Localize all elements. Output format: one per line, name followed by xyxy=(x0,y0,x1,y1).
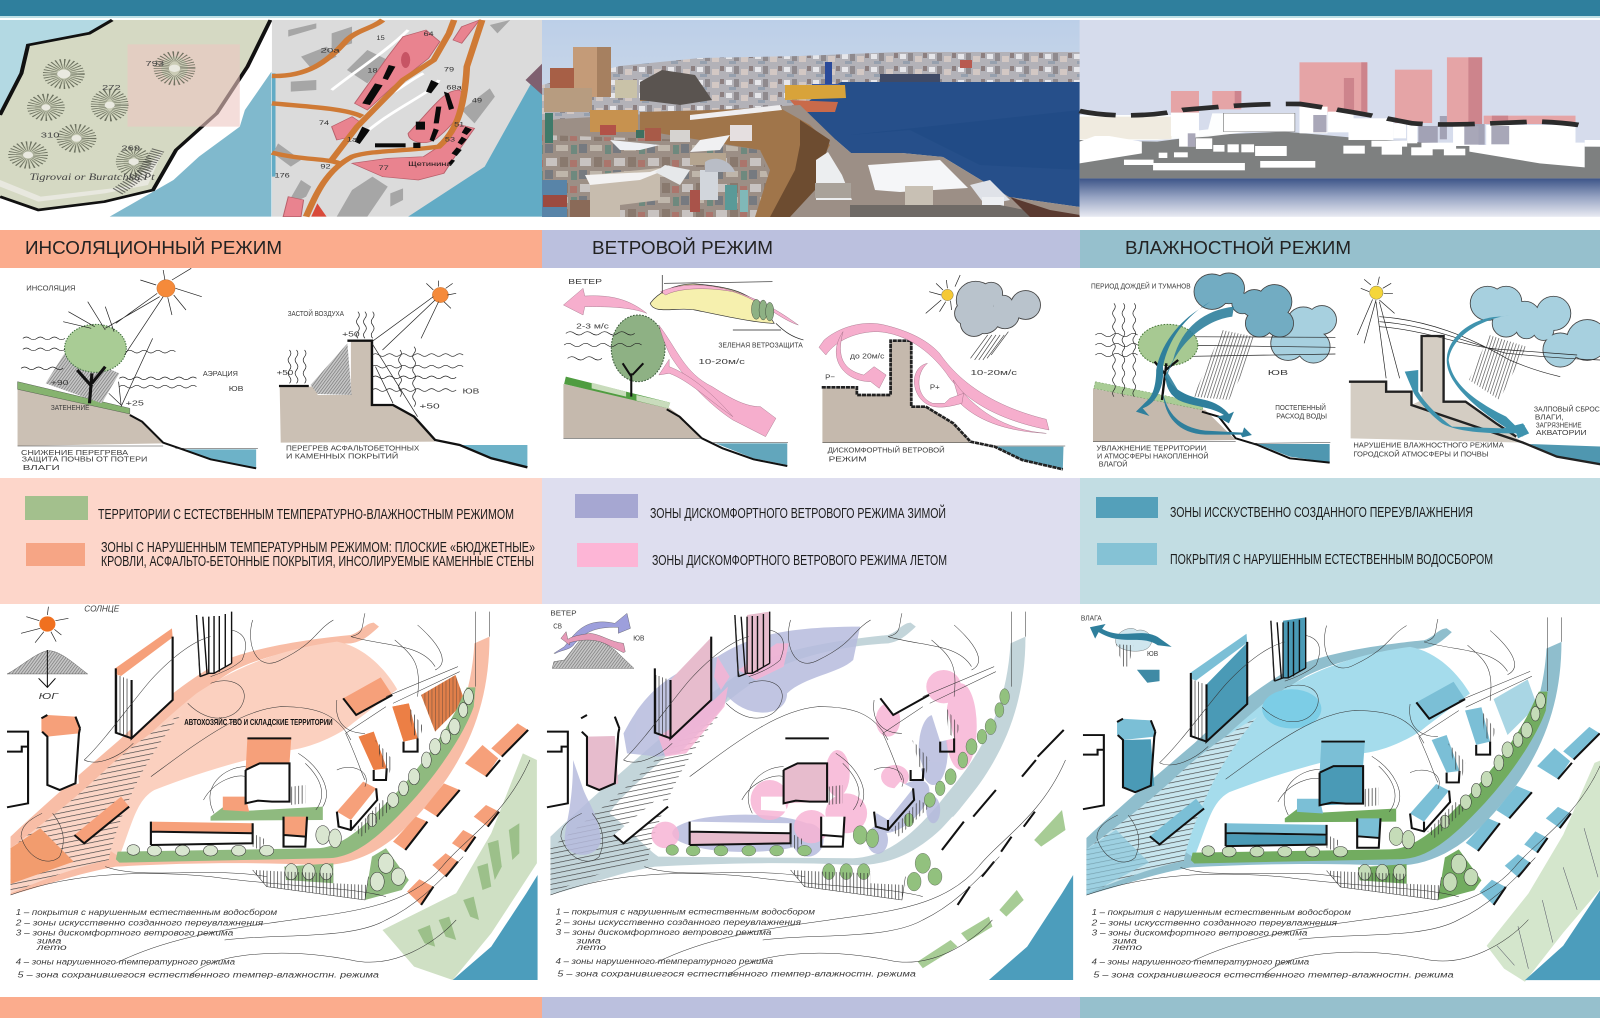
band: humidity heading xyxy=(1080,230,1600,268)
sketch: tree on slope xyxy=(18,268,258,472)
image: skyline silhouette section xyxy=(1080,20,1600,217)
sketch: wind around a wall: до 20м/с xyxy=(850,351,885,360)
sketch: tree, clouds and rain: ВЛАГОЙ xyxy=(1099,460,1127,469)
sketch: overheated wall xyxy=(277,281,527,467)
sketch: tree on slope: ЗАЩИТА ПОЧВЫ ОТ ПОТЕРИ xyxy=(22,454,147,463)
image: street map with red zones: 1a xyxy=(347,136,358,143)
image: street map with red zones: 77 xyxy=(379,165,389,172)
image: street map with red zones: 64 xyxy=(423,31,434,38)
sketch: tree on slope: ИНСОЛЯЦИЯ xyxy=(26,284,76,293)
sketch: wind around a wall xyxy=(819,275,1065,469)
image: street map with red zones: 49 xyxy=(472,97,482,104)
sketch: overheated wall: ЮВ xyxy=(462,387,479,395)
sketch: tree, clouds and rain xyxy=(1091,273,1336,469)
sketch: overheated wall: +50 xyxy=(342,330,360,339)
sketch: tree on slope: СНИЖЕНИЕ ПЕРЕГРЕВА xyxy=(21,448,129,457)
sketch: disturbed runoff: ВЛАГИ, xyxy=(1535,412,1564,421)
wind discomfort zones xyxy=(565,627,977,857)
handwritten key: 5 – зона сохранившегося естественного темпер-влажностн. режима xyxy=(1093,970,1454,979)
sketch: tree on slope: ВЛАГИ xyxy=(23,463,60,472)
sketch: disturbed runoff: АКВАТОРИИ xyxy=(1536,428,1587,437)
sketch: tree on slope: ЗАТЕНЕНИЕ xyxy=(51,403,89,412)
panel: insolation legend: ТЕРРИТОРИИ С ЕСТЕСТВЕННЫМ ТЕМПЕРАТУРНО-ВЛАЖНОСТНЫМ РЕЖИМОМ xyxy=(98,506,514,523)
sketch: tree windbreak: 2-3 м/с xyxy=(576,321,609,330)
handwritten key: зима xyxy=(575,935,601,945)
sketch: tree, clouds and rain: РАСХОД ВОДЫ xyxy=(1276,411,1327,420)
header bar xyxy=(0,0,1600,18)
pink towers xyxy=(1171,57,1576,124)
sketch: tree windbreak: ЗЕЛЕНАЯ ВЕТРОЗАЩИТА xyxy=(718,340,803,349)
handwritten key: зима xyxy=(36,936,62,945)
sketch: tree, clouds and rain: ЮВ xyxy=(1268,368,1288,377)
icon: moisture diagram xyxy=(1090,624,1172,683)
handwritten key: 3 – зоны дискомфортного ветрового режима xyxy=(556,927,772,937)
sketch: tree, clouds and rain: ПОСТЕПЕННЫЙ xyxy=(1275,403,1326,412)
image: photo of the bay xyxy=(542,20,1080,217)
handwritten key: 5 – зона сохранившегося естественного темпер-влажностн. режима xyxy=(557,969,916,979)
image: street map with red zones: 74 xyxy=(319,120,330,127)
sketch: wind around a wall: Р+ xyxy=(930,382,940,391)
sketch: tree, clouds and rain: И АТМОСФЕРЫ НАКОПЛЕННОЙ xyxy=(1097,451,1209,460)
handwritten key: 2 – зоны искусственно созданного переувлажнения xyxy=(15,918,264,928)
sketch: disturbed runoff: ЗАГРЯЗНЕНИЕ xyxy=(1536,421,1582,430)
handwritten key: лето xyxy=(35,942,67,952)
image: street map with red zones: 18 xyxy=(367,67,378,74)
image: historical island map: Tigrovai or Buratchka Pt xyxy=(30,171,155,182)
sketch: wind around a wall: Р− xyxy=(825,372,836,381)
footer band: wind xyxy=(542,997,1080,1018)
icon: wind rose diagram xyxy=(552,613,634,668)
panel: insolation site plan: ЮГ xyxy=(39,691,60,701)
image: historical island map: 310 xyxy=(41,131,60,140)
image: street map with red zones: 15 xyxy=(377,35,385,42)
panel: insolation legend: ЗОНЫ С НАРУШЕННЫМ ТЕМПЕРАТУРНЫМ РЕЖИМОМ: ПЛОСКИЕ «БЮДЖЕТНЫЕ» xyxy=(101,539,535,556)
sketch: disturbed runoff xyxy=(1349,277,1600,465)
panel: wind site plan: СВ xyxy=(553,621,562,630)
sketch: tree windbreak: ВЕТЕР xyxy=(568,277,602,286)
handwritten key: 1 – покрытия с нарушенным естественным водосбором xyxy=(556,906,815,916)
handwritten key: 4 – зоны нарушенного температурного режима xyxy=(556,956,773,966)
panel: wind legend: ЗОНЫ ДИСКОМФОРТНОГО ВЕТРОВОГО РЕЖИМА ЛЕТОМ xyxy=(652,552,947,569)
sketch: wind around a wall: РЕЖИМ xyxy=(829,455,866,464)
sketch: disturbed runoff: НАРУШЕНИЕ ВЛАЖНОСТНОГО РЕЖИМА xyxy=(1353,440,1505,449)
handwritten key: 3 – зоны дискомфортного ветрового режима xyxy=(16,928,234,938)
band: insolation heading xyxy=(0,230,542,268)
band: wind heading: ВЕТРОВОЙ РЕЖИМ xyxy=(592,237,773,258)
panel: wind site plan xyxy=(547,609,1073,980)
sketch: tree on slope: ЮВ xyxy=(229,384,244,393)
panel: wind site plan: ВЕТЕР xyxy=(550,609,577,618)
sketch: overheated wall: И КАМЕННЫХ ПОКРЫТИЙ xyxy=(286,451,398,460)
handwritten key: зима xyxy=(1111,936,1137,945)
image: street map with red zones: 51 xyxy=(454,121,464,128)
image: historical island map: 272 xyxy=(102,84,121,92)
sketch: overheated wall: ЗАСТОЙ ВОЗДУХА xyxy=(288,309,344,318)
image: street map with red zones: 92 xyxy=(320,163,331,170)
footer band: insolation xyxy=(0,997,542,1018)
handwritten key: 2 – зоны искусственно созданного переувлажнения xyxy=(554,917,802,927)
image: street map with red zones: 79 xyxy=(444,66,454,73)
sketch: overheated wall: ПЕРЕГРЕВ АСФАЛЬТОБЕТОННЫХ xyxy=(286,444,420,453)
panel: humidity site plan xyxy=(1081,614,1600,982)
panel: wind section sketches xyxy=(563,275,1065,469)
image: street map with red zones: 176 xyxy=(274,172,290,179)
image: street map with red zones xyxy=(272,20,542,217)
handwritten key: 4 – зоны нарушенного температурного режима xyxy=(1092,957,1310,966)
handwritten key: 4 – зоны нарушенного температурного режима xyxy=(16,957,235,967)
icon: sun and compass xyxy=(21,607,68,643)
sketch: tree on slope: АЭРАЦИЯ xyxy=(203,369,238,378)
panel: wind legend xyxy=(542,478,1080,604)
sketch: tree, clouds and rain: УВЛАЖНЕНИЕ ТЕРРИТОРИИ xyxy=(1096,444,1206,453)
handwritten key xyxy=(15,907,379,979)
handwritten key: лето xyxy=(575,942,606,952)
panel: wind site plan: ЮВ xyxy=(633,634,644,643)
panel: wind legend: ЗОНЫ ДИСКОМФОРТНОГО ВЕТРОВОГО РЕЖИМА ЗИМОЙ xyxy=(650,504,946,522)
sketch: overheated wall: +50 xyxy=(419,402,441,410)
image: street map with red zones: 68a xyxy=(446,84,463,91)
panel: insolation section sketches xyxy=(18,268,527,472)
band: humidity heading: ВЛАЖНОСТНОЙ РЕЖИМ xyxy=(1125,237,1351,258)
band: insolation heading: ИНСОЛЯЦИОННЫЙ РЕЖИМ xyxy=(25,237,282,258)
image: historical island map xyxy=(0,20,272,217)
dashed skyline xyxy=(1080,104,1592,127)
handwritten key: 5 – зона сохранившегося естественного темпер-влажностн. режима xyxy=(18,970,379,979)
panel: insolation site plan xyxy=(7,604,538,980)
image: street map with red zones: Щетинина xyxy=(408,161,452,168)
image: historical island map: 269 xyxy=(121,144,140,153)
sketch: wind around a wall: ДИСКОМФОРТНЫЙ ВЕТРОВОЙ xyxy=(828,446,945,455)
panel: insolation site plan: СОЛНЦЕ xyxy=(84,604,120,614)
panel: insolation legend: КРОВЛИ, АСФАЛЬТО-БЕТОННЫЕ ПОКРЫТИЯ, ИНСОЛИРУЕМЫЕ КАМЕННЫЕ СТЕНЫ xyxy=(101,553,534,570)
band: wind heading xyxy=(542,230,1080,268)
panel: humidity section sketches xyxy=(1091,273,1600,469)
sketch: tree on slope: +90 xyxy=(51,378,69,387)
handwritten key xyxy=(1090,907,1454,979)
sketch: wind around a wall: 10-20м/с xyxy=(970,368,1017,377)
sketch: tree windbreak xyxy=(563,275,803,466)
panel: humidity site plan: ЮВ xyxy=(1147,649,1158,658)
handwritten key: 3 – зоны дискомфортного ветрового режима xyxy=(1092,928,1308,937)
panel: humidity site plan: ВЛАГА xyxy=(1081,614,1102,623)
handwritten key xyxy=(554,906,916,979)
sketch: tree windbreak: 10-20м/с xyxy=(698,357,745,366)
panel: humidity legend xyxy=(1080,478,1600,604)
panel: humidity legend: ЗОНЫ ИССКУСТВЕННО СОЗДАННОГО ПЕРЕУВЛАЖНЕНИЯ xyxy=(1170,504,1473,521)
handwritten key: 1 – покрытия с нарушенным естественным водосбором xyxy=(1092,907,1351,917)
sketch: tree, clouds and rain: ПЕРИОД ДОЖДЕЙ И ТУМАНОВ xyxy=(1091,281,1191,290)
image: street map with red zones: 53 xyxy=(445,136,455,143)
panel: insolation site plan: АВТОХОЗЯЙС ТВО И СКЛАДСКИЕ ТЕРРИТОРИИ xyxy=(184,716,333,727)
handwritten key: лето xyxy=(1111,942,1143,952)
footer band: humidity xyxy=(1080,997,1600,1018)
image: street map with red zones: 20a xyxy=(320,47,341,54)
sketch: tree on slope: +25 xyxy=(126,399,145,408)
handwritten key: 1 – покрытия с нарушенным естественным водосбором xyxy=(16,907,277,917)
sketch: overheated wall: +50 xyxy=(277,368,294,377)
handwritten key: 2 – зоны искусственно созданного переувлажнения xyxy=(1090,918,1338,927)
image: historical island map: 793 xyxy=(145,60,164,68)
sketch: disturbed runoff: ГОРОДСКОЙ АТМОСФЕРЫ И ПОЧВЫ xyxy=(1353,450,1489,459)
panel: insolation legend xyxy=(0,478,542,604)
